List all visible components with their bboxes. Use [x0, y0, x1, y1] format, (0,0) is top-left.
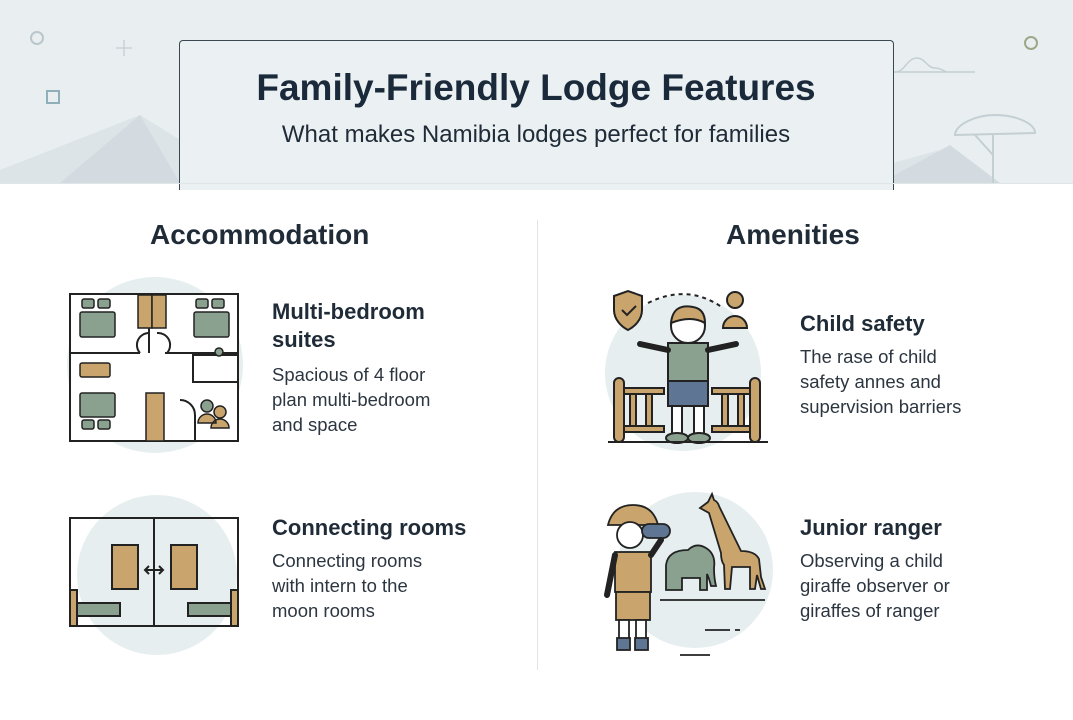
- text: multi-bedroom suites: Spacious of 4 floor: [272, 364, 425, 385]
- text: child safety: [800, 311, 961, 417]
- text: connecting rooms: moon rooms: [272, 600, 375, 621]
- text: connecting rooms: [272, 515, 466, 621]
- title: Family-Friendly Lodge Features: [256, 67, 816, 108]
- elephant: [666, 545, 716, 590]
- text: connecting rooms: with intern to the: [272, 575, 408, 596]
- text: junior ranger: giraffe observer or: [800, 575, 950, 596]
- icon: connecting rooms: [69, 495, 239, 655]
- text: multi-bedroom suites: plan multi-bedroom: [272, 389, 430, 410]
- icon: floor plan: [67, 277, 243, 453]
- text: multi-bedroom suites: Multi-bedroom: [272, 299, 425, 324]
- text: multi-bedroom suites: suites: [272, 327, 336, 352]
- text: junior ranger: [800, 515, 950, 621]
- heading: Amenities: Amenities: [726, 219, 860, 250]
- giraffe: [700, 494, 765, 589]
- text: junior ranger: Junior ranger: [800, 515, 942, 540]
- icon: child safety: [605, 290, 768, 451]
- icon: junior ranger: [604, 492, 773, 656]
- text: junior ranger: giraffes of ranger: [800, 600, 940, 621]
- decorative mountains: [0, 32, 1037, 183]
- header band: [0, 0, 1073, 183]
- text: child safety: supervision barriers: [800, 396, 961, 417]
- text: multi-bedroom suites: [272, 299, 430, 435]
- text: child safety: Child safety: [800, 311, 925, 336]
- text: junior ranger: Observing a child: [800, 550, 943, 571]
- text: child safety: safety annes and: [800, 371, 941, 392]
- text: connecting rooms: Connecting rooms: [272, 550, 422, 571]
- title box: [179, 40, 894, 190]
- text: connecting rooms: Connecting rooms: [272, 515, 466, 540]
- text: multi-bedroom suites: and space: [272, 414, 357, 435]
- text: child safety: The rase of child: [800, 346, 937, 367]
- heading: Accommodation: Accommodation: [150, 219, 369, 250]
- subtitle: What makes Namibia lodges perfect for families: [282, 121, 790, 148]
